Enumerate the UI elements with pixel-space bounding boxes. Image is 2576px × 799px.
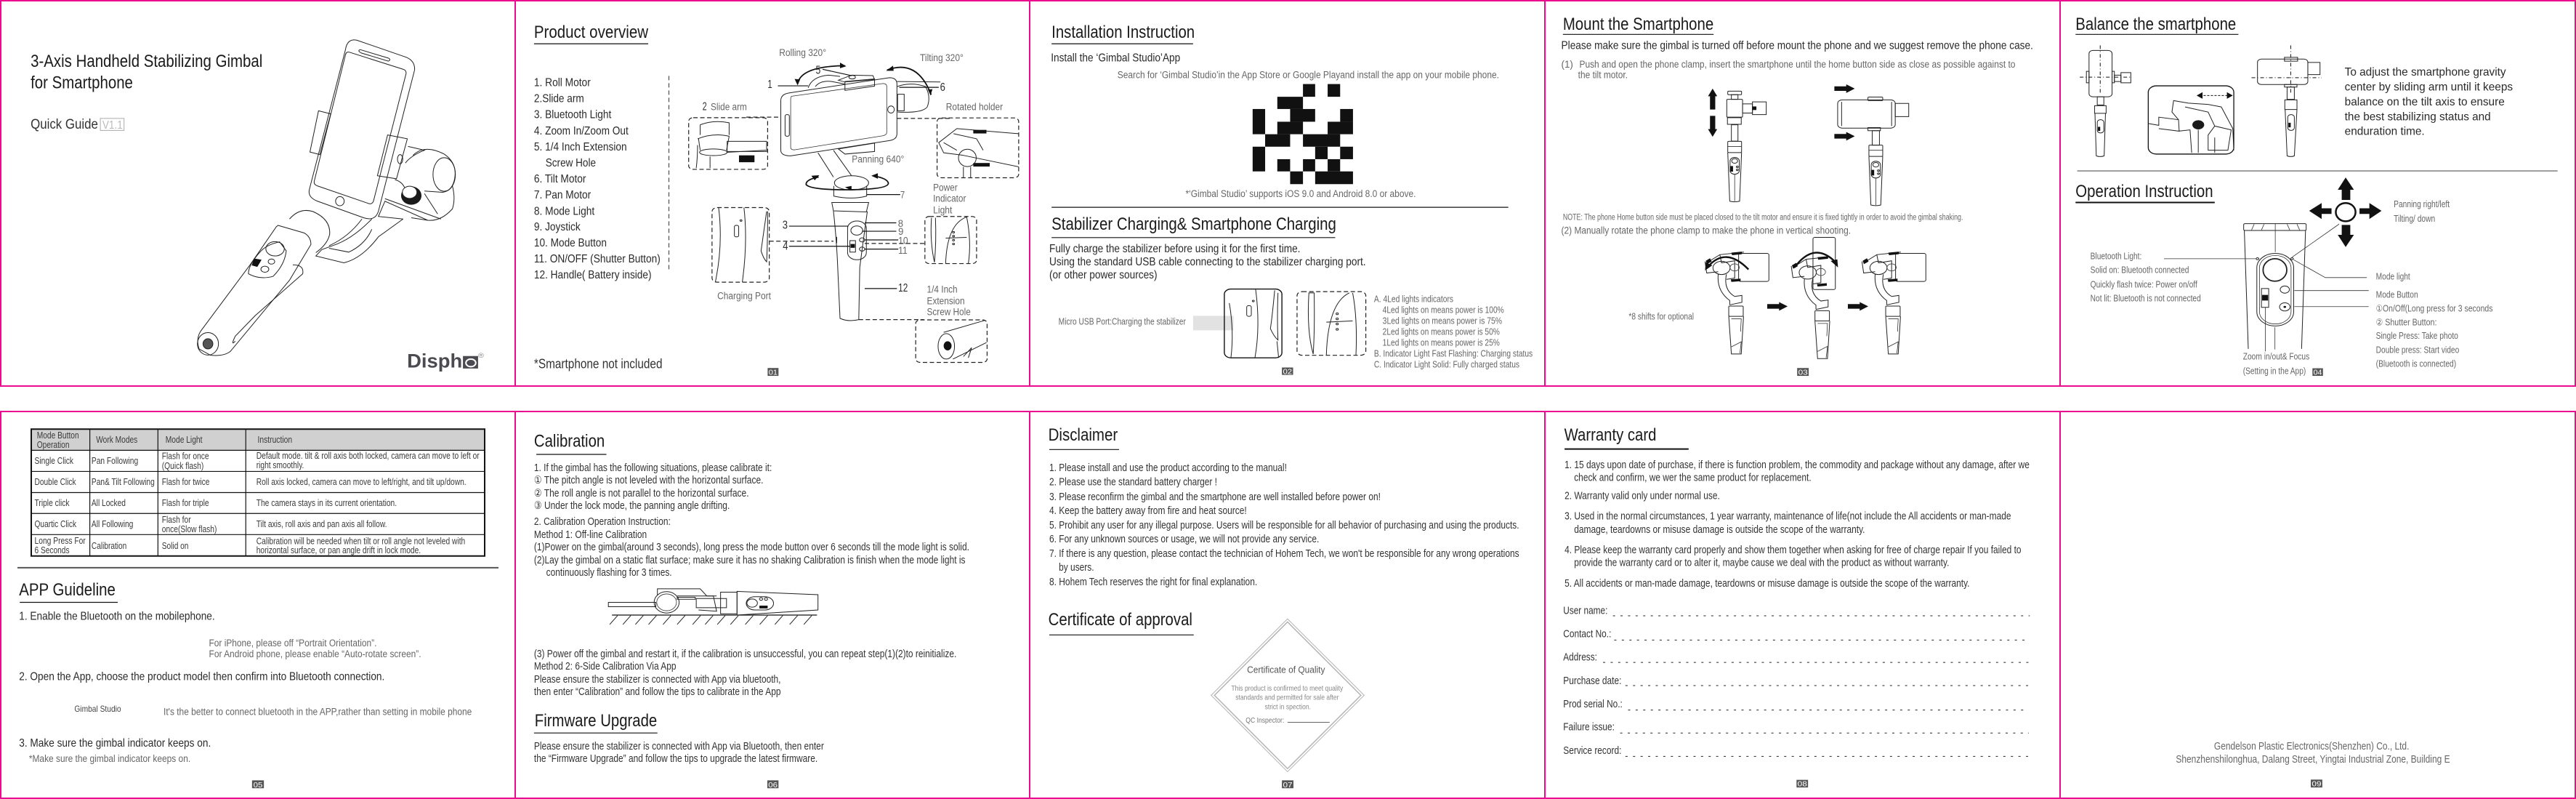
leader lines and part numbers: 6 [940,81,945,94]
balance instructions [2345,65,2513,137]
illustration: balance, landscape [2252,45,2322,156]
balance instructions: the best stabilizing status and [2345,110,2491,123]
bluetooth light description: Bluetooth Light: [2091,252,2141,262]
firmware text: Please ensure the stabilizer is connected with App via Bluetooth, then enter [534,740,824,752]
step 2 [19,670,472,718]
warranty terms: 5. All accidents or man-made damage, teardowns or misuse damage is outside the scope of the warranty. [1564,577,1969,589]
mode and shutter description: Double press: Start video [2376,345,2459,356]
table: mode button operations: Pan Following [92,457,138,466]
callout labels: Rotated holder [946,101,1004,113]
calibration steps: (2)Lay the gimbal on a static flat surface; make sure it has no shaking Calibration is finish when the mode light is [534,554,966,566]
optional shifts note: *8 shifts for optional [1628,312,1694,322]
bluetooth light description: Not lit: Bluetooth is not connected [2091,294,2201,304]
table: mode button operations [31,429,485,556]
charging text: Using the standard USB cable connecting to the stabilizer charging port. [1049,255,1366,268]
app support note: *‘Gimbal Studio’ supports iOS 9.0 and Android 8.0 or above. [1185,188,1416,199]
parts list: 1. Roll Motor [534,76,591,89]
inset: power indicator light [865,217,977,264]
zoom label: (Setting in the App) [2243,366,2306,377]
mode and shutter description: Single Press: Take photo [2376,332,2458,342]
heading: balance the smartphone: Balance the smartphone [2075,14,2236,33]
table: mode button operations: Double Click [35,478,76,487]
table: mode button operations: Solid on [162,542,188,551]
title: 3-Axis Handheld Stabilizing Gimbal [31,51,262,71]
panel: disclaimer and certificate [1049,425,1519,789]
certificate of quality diamond [1211,619,1364,771]
balance instructions: balance on the tilt axis to ensure [2345,95,2505,108]
parts list: 4. Zoom In/Zoom Out [534,124,629,137]
illustration: gimbal with phone [198,40,456,356]
title: for Smartphone [31,73,133,92]
charging text: Fully charge the stabilizer before using it for the first time. [1049,242,1300,254]
mode and shutter description [2376,272,2492,369]
callout labels [703,47,1004,318]
disclaimer list: 8. Hohem Tech reserves the right for final explanation. [1049,576,1257,587]
calibration steps [534,462,969,579]
calibration steps: ③ Under the lock mode, the panning angle drifting. [534,499,730,511]
inset: rotated holder [897,118,1019,178]
callout labels: Panning 640° [852,153,904,165]
parts list: 8. Mode Light [534,204,594,217]
heading: APP guideline [19,579,118,602]
calibration steps continued: Method 2: 6-Side Calibration Via App [534,660,677,672]
LED status list: C. Indicator Light Solid: Fully charged status [1374,360,1519,370]
calibration steps: 2. Calibration Operation Instruction: [534,515,671,527]
install app text: Install the ‘Gimbal Studio’App [1051,52,1180,64]
panel: mount the smartphone [1562,14,2033,377]
company name and address [2176,740,2450,766]
leader lines and part numbers: 7 [900,189,905,201]
table: mode button operations: Single Click [35,457,73,466]
illustration: open clamp [1708,89,1767,202]
table: mode button operations: The camera stays in its current orientation. [257,499,397,509]
parts list [534,76,661,281]
mode and shutter description: ② Shutter Button: [2376,318,2436,328]
callout labels: Indicator [933,193,966,204]
callout labels: Light [933,204,953,216]
joystick labels: Tilting/ down [2394,214,2435,224]
logo: Dispho: Disph [407,350,462,372]
leader lines and part numbers: 9 [898,226,903,237]
joystick labels [2394,199,2450,224]
heading: calibration [534,431,607,454]
LED status list [1374,294,1533,370]
step 1: 1. Enable the Bluetooth on the mobilephone. [19,609,215,622]
LED status list: 1Led lights on means power is 25% [1383,338,1500,348]
illustration: balance, portrait [2080,45,2131,156]
zoom label [2243,352,2309,377]
install app text [1051,52,1499,81]
illustration: gimbal overview [781,75,940,321]
heading: installation instruction: Installation Instruction [1051,23,1195,41]
table: mode button operations: Flash for [162,515,191,525]
heading: Product overview [534,23,648,41]
callout labels: Power [933,182,958,193]
parts list: 5. 1/4 Inch Extension [534,140,627,153]
install app text: Search for ‘Gimbal Studio’in the App Store or Google Playand install the app on your mobile phone. [1118,69,1499,81]
page number: 07 [1283,780,1293,789]
inset: screw hole [859,320,987,362]
parts list: Screw Hole [546,156,596,169]
page number: 02 [1283,367,1292,376]
mode and shutter description: (Bluetooth is connected) [2376,359,2456,369]
warranty terms: damage, teardowns or misuse damage is outside the scope of the warranty. [1574,523,1865,535]
table: mode button operations: Quartic Click [35,520,77,530]
table: mode button operations: Long Press For [35,537,86,546]
leader lines [2164,224,2369,307]
callout labels: Extension [927,295,965,307]
page number: 04 [2314,368,2322,377]
leader lines and part numbers: 1 [767,78,772,90]
illustration: LED indicators [1297,292,1366,356]
inset: charging port [712,207,833,282]
certificate of quality diamond: This product is confirmed to meet quality [1231,684,1344,693]
heading: operation instruction: Operation Instruction [2075,181,2213,201]
panel: product overview [534,23,1019,377]
illustration: gimbal laid flat [608,589,818,625]
panel: calibration and firmware [534,431,969,789]
heading: Mount the Smartphone [1563,14,1713,33]
table: mode button operations: Instruction [258,435,292,446]
firmware text: the “Firmware Upgrade” and follow the tips to upgrade the latest firmware. [534,752,817,765]
label: micro USB port: Micro USB Port:Charging the stabilizer [1059,317,1186,327]
heading: stabilizer charging: Stabilizer Charging& Smartphone Charging [1051,214,1336,233]
table: mode button operations: Calibration [92,542,126,551]
step 1: For iPhone, please off “Portrait Orientation”. [209,638,376,649]
table: mode button operations: Operation [37,441,70,451]
leader lines and part numbers: 8 [898,218,903,229]
parts list: 2.Slide arm [534,92,584,105]
step 2: It's the better to connect bluetooth in the APP,rather than setting in mobile phone [163,706,472,718]
warranty form fields: Contact No.: [1563,627,1611,640]
heading: disclaimer [1049,425,1119,449]
title [31,51,262,92]
bluetooth light description: Quickly flash twice: Power on/off [2091,280,2197,290]
step 3: *Make sure the gimbal indicator keeps on. [29,753,190,765]
logo: Dispho: ® [478,352,484,360]
step 2 text: (2) Manually rotate the phone clamp to make the phone in vertical shooting. [1562,225,1851,236]
LED status list: A. 4Led lights indicators [1374,294,1453,305]
certificate of quality diamond: Certificate of Quality [1247,665,1325,675]
callout labels: Screw Hole [927,306,971,318]
instructions: the tilt motor. [1578,69,1628,81]
joystick direction arrows [2309,177,2381,247]
warranty terms: 3. Used in the normal circumstances, 1 year warranty, maintenance of life(not include the All accidents or man-made [1564,510,2011,522]
table: mode button operations: Pan& Tilt Following [92,478,155,487]
page number: 09 [2311,779,2322,788]
table: mode button operations: All Following [92,520,133,530]
LED status list: 3Led lights on means power is 75% [1383,316,1502,326]
warranty form fields: User name: [1563,605,1607,617]
heading: calibration: Calibration [534,431,605,451]
parts list: 11. ON/OFF (Shutter Button) [534,252,661,265]
panel: mode table and app guideline [17,429,498,789]
arrow [1767,302,1788,310]
panel: installation and charging [1049,23,1533,376]
version tag: V1.1 [102,118,123,131]
leader lines and part numbers [767,64,945,294]
table: mode button operations: Tilt axis, roll axis and pan axis all follow. [257,520,387,530]
QR code pattern [1253,84,1353,184]
callout labels: Slide arm [711,101,747,113]
mode and shutter description: Mode Button [2376,290,2418,300]
illustration: sliding arm inset [2148,86,2234,154]
warranty terms: 2. Warranty valid only under normal use. [1564,490,1720,502]
page number: 06 [768,780,778,789]
heading: APP guideline: APP Guideline [19,579,116,599]
table: mode button operations: Work Modes [96,435,137,446]
warranty form fields: Prod serial No.: [1563,698,1623,710]
disclaimer list: 6. For any unknown sources or usage, we will not provide any service. [1049,533,1319,545]
arrow [1848,302,1868,310]
heading: firmware upgrade: Firmware Upgrade [535,710,657,730]
page number: 03 [1798,368,1808,377]
parts list: 10. Mode Button [534,236,607,249]
table: mode button operations: right smoothly. [257,460,304,470]
mode and shutter description: ①On/Off(Long press for 3 seconds [2376,304,2492,314]
callout labels: Charging Port [717,290,771,302]
heading: certificate of approval: Certificate of approval [1049,609,1192,629]
note: NOTE: The phone Home button side must be placed closed to the tilt motor and ensure it is fixed tightly in order to avoid the gimbal shaking. [1563,212,1963,222]
disclaimer list: by users. [1059,561,1094,574]
leader lines and part numbers: 5 [816,64,820,76]
parts list: 6. Tilt Motor [534,172,586,185]
panel: back cover [2176,740,2450,788]
table: mode button operations: horizontal surface, or pan angle drift in lock mode. [257,546,421,556]
disclaimer list: 4. Keep the battery away from fire and heat source! [1049,505,1247,516]
table: mode button operations: Default mode. tilt & roll axis both locked, camera can move to left or [257,451,480,461]
zoom label: Zoom in/out& Focus [2243,352,2309,362]
calibration steps: Method 1: Off-line Calibration [534,529,647,540]
warranty form fields: Failure issue: [1563,721,1615,733]
subtitle: quick guide: Quick Guide [31,116,98,132]
step 3: 3. Make sure the gimbal indicator keeps on. [19,736,211,750]
table: mode button operations: Flash for twice [162,478,209,487]
leader lines and part numbers: 12 [898,281,908,294]
instructions: (1) [1562,59,1573,70]
table: mode button operations: All Locked [92,499,126,509]
table: mode button operations: Calibration will be needed when tilt or roll angle not leveled with [257,537,465,547]
table: mode button operations: Roll axis locked, camera can move to left/right, and tilt up/down. [257,478,467,487]
parts list: 12. Handle( Battery inside) [534,268,652,281]
warranty form fields [1563,605,2030,756]
illustration: rotating the clamp, step C [1862,252,1926,354]
parts list: 3. Bluetooth Light [534,108,611,121]
firmware text [534,740,824,765]
leader lines and part numbers: 11 [898,245,908,257]
warranty form fields: Address: [1563,651,1597,663]
balance instructions: enduration time. [2345,125,2425,137]
step 1: For Android phone, please enable “Auto-rotate screen”. [209,649,421,660]
warranty terms: provide the warranty card or to alter it, maybe cause we deal with the product as without warranty. [1574,557,1949,569]
note: smartphone not included: *Smartphone not included [534,357,662,372]
bluetooth light description: Solid on: Bluetooth connected [2091,265,2189,276]
calibration steps: ② The roll angle is not parallel to the horizontal surface. [534,487,749,499]
leader lines and part numbers: 10 [898,235,908,246]
charging text: (or other power sources) [1049,268,1158,281]
calibration steps: (1)Power on the gimbal(around 3 seconds), long press the mode button over 6 seconds till the mode light is solid. [534,541,969,553]
certificate of quality diamond: standards and permitted for sale after [1235,693,1339,702]
panel: balance and operation [2075,14,2558,377]
callout labels: 1/4 Inch [927,284,958,295]
illustration: charging port [1224,289,1282,358]
table: mode button operations: Triple click [35,499,70,509]
bluetooth light description [2091,252,2201,304]
calibration steps continued [534,648,956,697]
leader lines and part numbers: 4 [783,239,788,252]
panel: warranty card [1563,425,2030,788]
panel: cover page [31,40,484,372]
certificate of quality diamond: QC Inspector: [1245,716,1284,725]
calibration steps: ① The pitch angle is not leveled with the horizontal surface. [534,474,764,486]
table: mode button operations: Mode Light [166,435,202,446]
warranty form fields: Service record: [1563,744,1621,756]
callout labels: Tilting 320° [920,52,964,64]
page number: 01 [769,368,778,377]
mode and shutter description: Mode light [2376,272,2410,282]
warranty terms [1564,459,2030,589]
warranty terms: 1. 15 days upon date of purchase, if there is function problem, the commodity and package without any damage, after we [1564,459,2030,470]
LED status list: 2Led lights on means power is 50% [1383,327,1500,337]
company name and address: Gendelson Plastic Electronics(Shenzhen) Co., Ltd. [2214,740,2409,752]
step 2: 2. Open the App, choose the product model then confirm into Bluetooth connection. [19,670,384,683]
illustration: rotating the clamp, step A [1705,252,1769,354]
table: mode button operations: once(Slow flash) [162,525,217,535]
calibration steps continued: Please ensure the stabilizer is connected with App via bluetooth, [534,673,781,685]
calibration steps: 1. If the gimbal has the following situations, please calibrate it: [534,462,772,474]
balance instructions: center by sliding arm until it keeps [2345,81,2513,93]
calibration steps: continuously flashing for 3 times. [546,566,672,579]
warranty terms: 4. Please keep the warranty card properly and show them together when asking for free of charge repair If you failed to [1564,544,2022,555]
illustration: control panel [2244,224,2306,351]
table: mode button operations: Flash for triple [162,499,209,509]
warranty terms: check and confirm, we wer the same product for replacement. [1574,472,1812,483]
instructions [1562,39,2033,81]
parts list: 9. Joystick [534,220,581,233]
table: mode button operations: 6 Seconds [35,546,70,556]
calibration steps continued: (3) Power off the gimbal and restart it, if the calibration is unsuccessful, you can repeat step(1)(2)to reinitialize. [534,648,956,660]
step 3 [19,736,211,765]
disclaimer list [1049,462,1519,587]
callout labels: 2 [703,100,707,113]
LED status list: B. Indicator Light Fast Flashing: Charging status [1374,349,1533,359]
calibration steps continued: then enter “Calibration” and follow the tips to calibrate in the App [534,686,781,697]
illustration: phone mounted [1834,84,1909,206]
warranty form fields: Purchase date: [1563,675,1621,686]
instructions: Push and open the phone clamp, insert the smartphone until the home button side as close as possible against to [1579,59,2015,70]
charging text [1049,242,1366,281]
step 2: Gimbal Studio [74,704,121,714]
callout labels: Rolling 320° [779,47,826,59]
USB cable placeholder [1193,316,1234,330]
page number: 08 [1798,779,1807,788]
instructions: Please make sure the gimbal is turned off before mount the phone and we suggest remove the phone case. [1562,39,2033,52]
table: mode button operations: (Quick flash) [162,462,203,471]
version tag [100,118,124,131]
table: mode button operations: Flash for once [162,451,209,462]
parts list: 7. Pan Motor [534,188,591,201]
disclaimer list: 3. Please reconfirm the gimbal and the smartphone are well installed before power on! [1049,491,1381,502]
balance instructions: To adjust the smartphone gravity [2345,65,2506,79]
disclaimer list: 5. Prohibit any user for any illegal purpose. Users will be responsible for all behavior of purchasing and using the products. [1049,519,1519,531]
heading: disclaimer: Disclaimer [1049,425,1118,444]
certificate of quality diamond: strict in spection. [1265,702,1311,711]
illustration: rotating the clamp, step B [1791,237,1838,358]
table: mode button operations: Mode Button [37,431,79,441]
arrows: rotation axes [795,63,932,190]
LED status list: 4Led lights on means power is 100% [1383,305,1504,316]
disclaimer list: 2. Please use the standard battery charger ! [1049,476,1217,488]
step 1 [19,609,421,660]
disclaimer list: 7. If there is any question, please contact the technician of Hohem Tech, we won't be responsible for any wrong operations [1049,547,1519,560]
leader lines and part numbers: 3 [783,219,788,231]
disclaimer list: 1. Please install and use the product according to the manual! [1049,462,1287,474]
joystick labels: Panning right/left [2394,199,2450,209]
heading: Warranty card [1564,425,1656,444]
page number: 05 [254,780,263,789]
inset: slide arm [689,117,781,169]
